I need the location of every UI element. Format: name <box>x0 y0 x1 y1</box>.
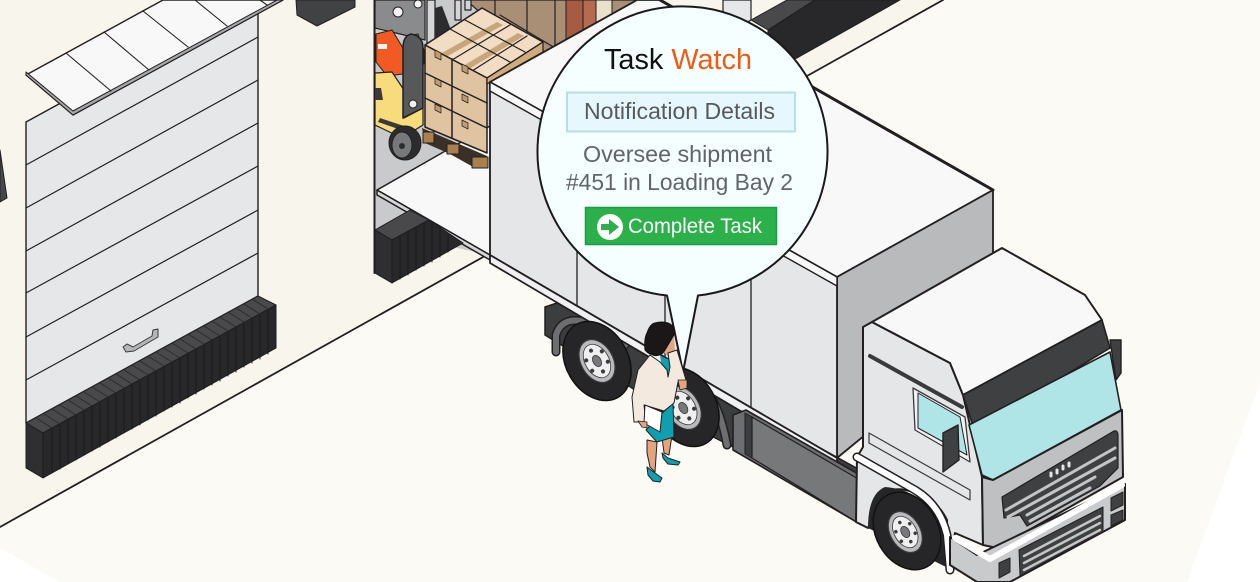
pallet of cardboard boxes <box>422 8 543 168</box>
cab front panel <box>982 410 1123 548</box>
skirt <box>646 403 674 442</box>
cab side stripe <box>869 433 970 500</box>
complete task button <box>586 208 776 244</box>
side air deflector <box>870 356 962 407</box>
door handle <box>123 329 158 352</box>
lower hand <box>638 421 647 428</box>
blouse <box>660 356 670 382</box>
rear wheel 1 <box>549 309 645 413</box>
hair <box>645 322 675 356</box>
truck chassis <box>490 255 860 515</box>
folder <box>644 405 662 432</box>
notification message <box>566 141 793 195</box>
side fuel tank <box>733 410 860 524</box>
face <box>664 336 675 357</box>
door canopy <box>26 0 283 115</box>
forklift with driver <box>375 0 471 160</box>
far door and bumper <box>723 0 900 66</box>
complete task button: Complete Task <box>628 215 762 238</box>
windscreen <box>969 352 1121 480</box>
upper grille <box>1002 431 1118 526</box>
notification message: Oversee shipment <box>583 141 773 167</box>
notification message: #451 in Loading Bay 2 <box>566 169 793 195</box>
truck cargo box <box>490 0 993 458</box>
right mirror <box>1110 340 1121 380</box>
warehouse wall <box>0 0 943 527</box>
notification details box <box>567 92 795 132</box>
cab side panel <box>856 322 983 567</box>
rear wheel 2 <box>637 355 733 459</box>
truck loading platform <box>377 126 490 260</box>
front bumper <box>950 484 1125 582</box>
fender trim highlight <box>857 457 950 570</box>
shoes <box>647 453 680 482</box>
cab roof <box>872 248 1102 395</box>
bubble title: Task Watch <box>604 44 752 76</box>
speech bubble <box>538 6 828 372</box>
open bay interior <box>374 0 640 273</box>
legs <box>647 435 672 472</box>
notification details box: Notification Details <box>584 98 775 124</box>
canopy bracket <box>296 0 355 26</box>
wing mirror <box>943 425 959 472</box>
left edge door bracket <box>0 150 7 202</box>
front wheel <box>860 480 954 582</box>
closed loading dock door <box>26 0 258 423</box>
dock bumper: bay <box>375 210 463 283</box>
hand and watch <box>678 380 687 390</box>
side window <box>913 388 970 462</box>
woman with clipboard <box>632 322 687 482</box>
wheel arch <box>868 487 948 568</box>
truck cab <box>856 248 1125 582</box>
dock bumper: left <box>26 296 276 478</box>
sun visor <box>963 320 1110 425</box>
fender trim <box>857 457 950 570</box>
jacket <box>632 350 686 422</box>
